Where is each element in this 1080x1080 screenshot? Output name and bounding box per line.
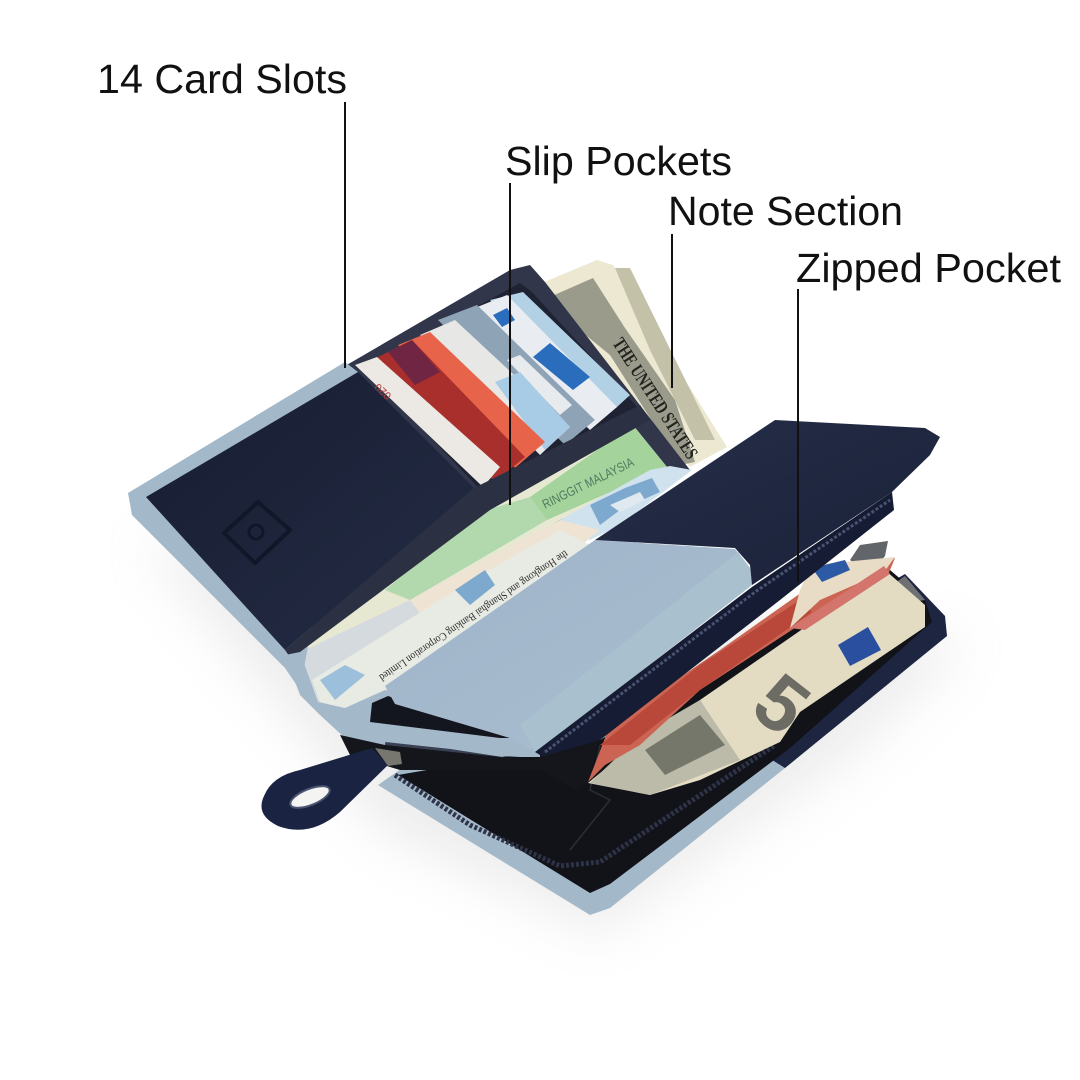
white card with blue bar [465, 295, 617, 430]
card stack [355, 292, 630, 487]
orange map card [398, 332, 545, 468]
dollar notes [530, 260, 727, 467]
middle flap [385, 420, 940, 752]
pale blue card [490, 292, 630, 420]
label: Zipped Pocket: Zipped Pocket [796, 245, 1062, 291]
zipper [385, 492, 894, 765]
red notes [588, 557, 895, 782]
grey corner tab [850, 541, 925, 604]
beige note [410, 520, 600, 640]
left card flap [128, 362, 650, 690]
hong kong bank note [312, 530, 590, 708]
label: 14 Card Slots: 14 Card Slots [97, 56, 347, 102]
wallet [128, 260, 947, 915]
bank text: the Hongkong and Shanghai Banking Corporation Limited [376, 548, 570, 684]
pocket backing [298, 510, 600, 705]
blue 20 note [560, 466, 692, 540]
zip pull tab [261, 748, 402, 830]
lower wallet section [378, 570, 947, 915]
card section backing [285, 265, 690, 660]
white and blue card [420, 320, 570, 455]
euro notes [588, 570, 925, 795]
label: Slip Pockets: Slip Pockets [505, 138, 732, 184]
grey blue card [438, 305, 595, 445]
lower flap band [285, 652, 540, 757]
dollar text: THE UNITED STATES [608, 334, 702, 463]
ringgit text: RINGGIT MALAYSIA [540, 454, 636, 512]
red card [368, 340, 525, 482]
flap window [370, 696, 510, 738]
green ringgit note [300, 425, 667, 650]
black inner pocket [340, 735, 600, 790]
wallet shadow [140, 540, 970, 935]
euro denomination: 5 [738, 656, 826, 752]
label: Note Section: Note Section [668, 188, 903, 234]
white card with 020 [355, 357, 500, 487]
card stack: 020 [372, 380, 394, 402]
embossed logo [224, 502, 290, 563]
